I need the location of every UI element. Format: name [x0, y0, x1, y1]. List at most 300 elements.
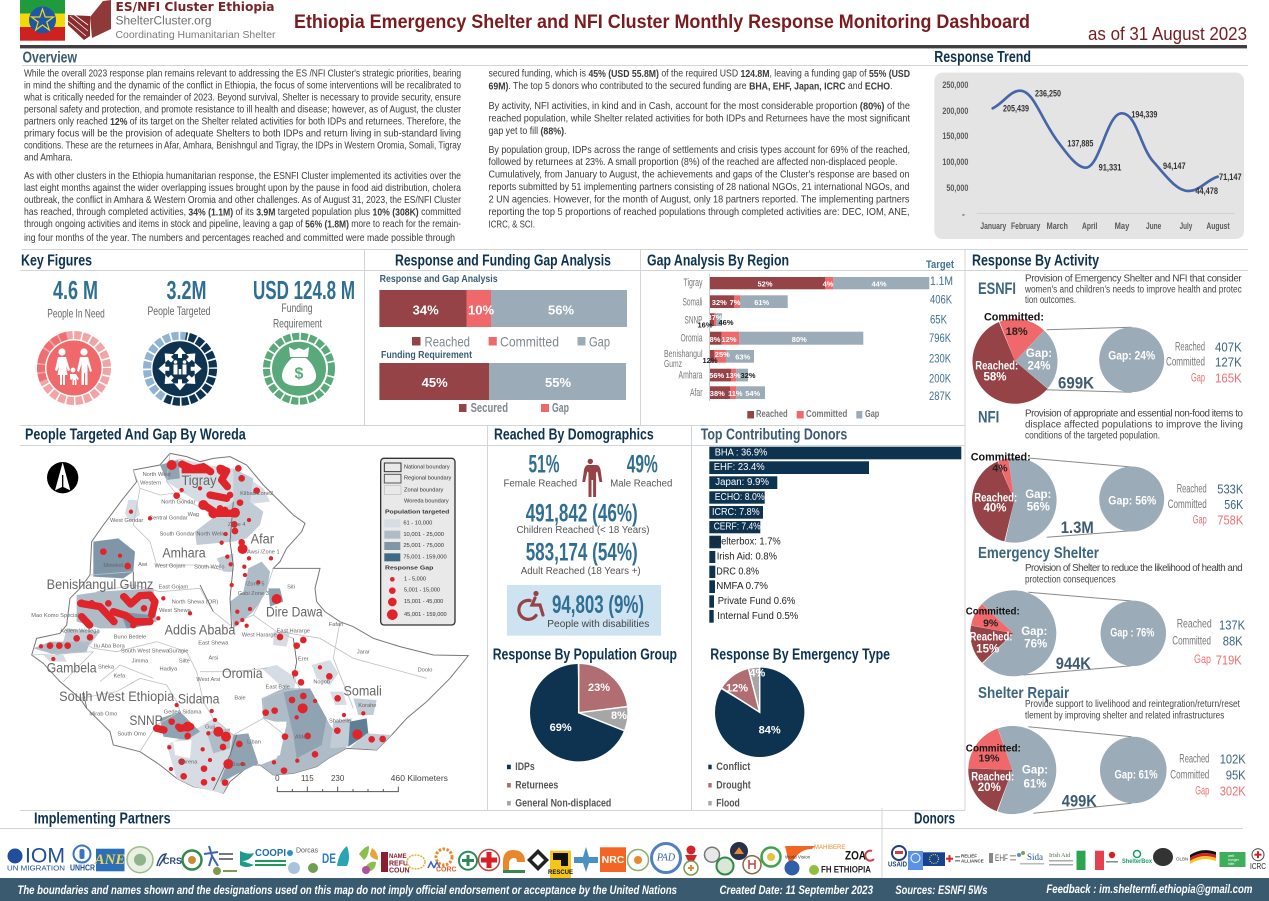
pie chart: emergency type: 4% [749, 668, 765, 680]
pie chart: shelter repair: 61% [1023, 778, 1047, 790]
breakout pie: gap: Gap: 24% [1108, 349, 1155, 363]
map labels: zones: Arsi [208, 655, 218, 661]
row: Tigray: 52% [757, 280, 773, 288]
row: Tigray [684, 274, 953, 289]
activity: shelter repair: tlement by improving shelter and related infrastructures [1025, 710, 1224, 722]
map labels: zones: East Shewa [198, 640, 229, 646]
callout: people with disabilities: People with disabilities [547, 619, 649, 630]
legend: region bars: Gap [865, 409, 879, 420]
activity: NFI: Provision of appropriate and essential non-food items to [1025, 408, 1244, 420]
stat: male reached [610, 450, 672, 490]
overview text: right column [488, 68, 910, 230]
panel: key figures [21, 252, 355, 410]
map labels: zones: Central Gondar [149, 515, 188, 521]
heading: population group: Response By Population Group [493, 646, 677, 664]
stat: adult reached: 583,174 (54%) [526, 538, 638, 566]
map labels: zones: Mirab Omo [89, 711, 117, 717]
callout: people with disabilities: 94,803 (9%) [552, 591, 644, 619]
stat: children reached [516, 499, 650, 536]
overview text: left column: personal safety and protection, and promote resistance to ill health and disease; however, as of August, the cluster [24, 104, 462, 116]
pie chart: population group: 23% [588, 682, 610, 694]
bar chart: donors: BHA : 36.9% [715, 448, 767, 458]
figure: funding requirement: USD 124.8 M [253, 275, 355, 305]
map legend [381, 458, 455, 625]
figure: people targeted: People Targeted [148, 304, 210, 318]
map labels: zones: Doolo [418, 668, 432, 674]
bar chart: donors: Shelterbox: 1.7% [710, 536, 781, 548]
map labels: zones: West Shewa [159, 608, 192, 614]
map labels: regions: Tigray [181, 472, 216, 488]
heading: response and funding gap analysis: Response and Funding Gap Analysis [395, 252, 611, 270]
logos: partners: PAD [656, 852, 676, 864]
overview text: left column: has reached, through completed activities, 34% (1.1M) of its 3.9M targeted population plus 10% (308K) committed [24, 207, 461, 218]
line chart: monthly reached: - [962, 209, 965, 219]
heading: response trend: Response Trend [934, 49, 1031, 66]
stat: female reached: 51% [528, 450, 560, 478]
map labels: regions: Oromia [222, 665, 263, 681]
row: Afar: 54% [745, 389, 761, 398]
legend: region bars [747, 409, 879, 420]
overview text: right column: reached population, while Shelter related activities for both IDPs and Returnees have the most significant [488, 114, 910, 124]
row: Tigray: 1.1M [930, 274, 953, 288]
pie chart: shelter repair: Reached: [971, 772, 1014, 784]
map labels: regions: Benishangul Gumz [47, 576, 153, 592]
total: 699K: 699K [1058, 374, 1095, 392]
row: SNNP: 65K [930, 312, 947, 326]
logos: donors: ICRC [1250, 862, 1266, 871]
figure: people targeted: 3.2M [166, 275, 206, 305]
heading: demographics: Reached By Domographics [494, 426, 654, 444]
overview text: right column: secured funding, which is 45% (USD 55.8M) of the required USD 124.8M, leaving a funding gap of 55% (USD [488, 68, 910, 80]
map labels: zones: Kefa [114, 674, 126, 680]
activity: emergency shelter: Provision of Shelter to reduce the likelihood of health and [1025, 563, 1243, 574]
panel: response by activity [966, 252, 1246, 813]
pie chart: shelter repair [966, 742, 1048, 798]
stats [1170, 752, 1246, 799]
heading: implementing partners: Implementing Partners [34, 810, 171, 828]
row: Somali: 406K [930, 292, 952, 306]
bar chart: donors: ICRC: 7.8% [712, 507, 760, 518]
stats: Committed [1172, 634, 1211, 648]
total: 944K: 944K [1056, 654, 1091, 673]
line chart: monthly reached: 94,147 [1163, 161, 1186, 171]
overview text: right column: By population group, IDPs across the range of settlements and crisis types account for 69% of the reached, [488, 145, 910, 156]
icon: money bag in ring: $ [295, 366, 304, 382]
map labels: zones: Ilu Aba Bora [94, 644, 126, 650]
pie chart: population group: 8% [611, 710, 627, 722]
line chart: monthly reached: June [1146, 221, 1161, 231]
map labels: zones: Gedeo Sidama [164, 709, 202, 715]
subheading: response and gap analysis: Response and Gap Analysis [380, 273, 498, 285]
breakout pie: gap: Gap: 56% [1108, 493, 1157, 507]
map labels: zones: Liban [247, 740, 261, 746]
stats: Reached [1177, 616, 1212, 630]
stats [1168, 483, 1244, 528]
overview text: left column: partners only reached 12% of its target on the Shelter related activities for both IDPs and returnees. Therefore, the [24, 116, 461, 128]
panel: reached by demographics [494, 426, 672, 636]
map labels: regions: Gambela [47, 660, 97, 676]
logos: partners [7, 842, 874, 878]
map labels: zones: South West Shewa [121, 649, 170, 655]
bar chart: donors: DRC 0.8% [716, 566, 759, 577]
line chart: monthly reached: 200,000 [942, 106, 968, 116]
map labels: zones: Awsi /Zone 1 [247, 550, 280, 556]
logos: partners: ANE [94, 852, 125, 868]
activity: ESNFI [975, 274, 1242, 392]
stat: female reached [503, 450, 577, 490]
bar chart: donors: NMFA 0.7% [716, 581, 768, 592]
stat: male reached: 49% [627, 450, 658, 478]
stats: 102K [1220, 752, 1246, 766]
logos: partners: IOM [25, 844, 65, 868]
row: Afar [690, 386, 951, 403]
heading: donors: Donors [914, 810, 955, 828]
stats: 758K [1217, 514, 1244, 528]
stat: children reached: Children Reached (< 18 Years) [516, 525, 650, 536]
legend: emergency type [708, 761, 751, 809]
stacked bar: response: 56% [548, 302, 574, 318]
pie chart: ESNFI: 24% [1027, 360, 1051, 372]
row: SNNP: 16% [697, 320, 713, 330]
pie chart: ESNFI: Reached: [975, 361, 1018, 373]
stats: 137K [1219, 618, 1246, 632]
row: Amhara: 13% [725, 371, 741, 380]
stats: 407K [1215, 340, 1242, 354]
stacked bar: funding: 55% [545, 375, 571, 390]
map labels: regions: South West Ethiopia [59, 688, 174, 704]
icon: Ethiopian flag [20, 0, 65, 41]
activity: emergency shelter: Emergency Shelter [978, 545, 1099, 562]
line chart: monthly reached: February [1011, 221, 1041, 231]
panel: donors [888, 810, 1266, 871]
created date: Created Date: 11 September 2023 [720, 883, 873, 897]
logos: partners: DE [322, 850, 336, 866]
pie chart: emergency shelter: 76% [1024, 638, 1047, 650]
overview text: left column: through ongoing activities and items in stock and pipeline, leaving a gap of 56% (1.8M) more to reach for the remain- [24, 219, 461, 230]
pie chart: emergency type [722, 668, 791, 743]
stats: Gap [1193, 515, 1207, 527]
map labels: zones: Wag [188, 512, 199, 518]
pie chart: emergency shelter [966, 603, 1047, 664]
activity: emergency shelter: protection consequences [1025, 574, 1116, 586]
legend: region bars: Reached [756, 409, 788, 420]
pie chart: population group [547, 664, 627, 744]
logos: donors: OLBN [1176, 856, 1188, 862]
response gap dots [172, 465, 357, 764]
header [20, 0, 1247, 48]
pie chart: ESNFI: Committed: [984, 312, 1044, 324]
panel: gap analysis by region [647, 252, 954, 420]
logos: partners: COUN [389, 868, 410, 874]
map labels: zones: Hadiya [160, 666, 178, 672]
row: Benishangul Gumz [664, 349, 951, 370]
stats: Committed [1166, 357, 1205, 369]
icon: shelter cluster logo [68, 0, 111, 40]
map labels: zones: East Gojam [159, 585, 188, 591]
line chart: monthly reached: 250,000 [942, 80, 968, 90]
row: Amhara: Amhara [678, 369, 703, 381]
row: Amhara: 56% [709, 371, 725, 380]
line chart: monthly reached: January [980, 221, 1007, 231]
bar chart: donors: Irish Aid: 0.8% [717, 552, 777, 562]
stats [1166, 340, 1242, 386]
pie chart: emergency shelter: Gap: [1021, 626, 1047, 638]
logos: partners: CORC [436, 866, 457, 874]
stat: adult reached: Adult Reached (18 Years +) [521, 566, 641, 577]
activity: NFI: NFI [978, 408, 999, 426]
pie chart: ESNFI: Gap: [1026, 348, 1052, 360]
overview text: left column: As with other clusters in the Ethiopia humanitarian response, the ESNFI Cluster implemented its activities over the [24, 171, 461, 182]
panel: response trend [934, 49, 1244, 239]
legend: funding bar [459, 401, 569, 415]
overview text: right column: reporting the top 5 proportions of reached populations through completed activities are: DEC, IOM, ANE, [488, 207, 910, 218]
line chart: monthly reached: 236,250 [1035, 88, 1061, 98]
activity: emergency shelter [966, 545, 1246, 675]
map labels: zones: East Bale [266, 685, 290, 691]
pie chart: emergency shelter: 9% [983, 618, 999, 630]
map labels: zones: Jarar [357, 650, 370, 656]
line chart: monthly reached: 137,885 [1067, 138, 1093, 148]
map scale bar [275, 774, 448, 792]
logos: donors: Sida [1027, 852, 1043, 862]
pie chart: NFI: 56% [1027, 501, 1050, 513]
map legend: Regional boundary [404, 476, 452, 482]
stats: Reached [1177, 484, 1207, 496]
legend: population group: IDPs [515, 761, 535, 773]
map labels: zones: North Gondar [161, 499, 196, 505]
cluster name: ES/NFI Cluster Ethiopia [116, 0, 274, 14]
legend: region bars: Committed [806, 409, 847, 420]
legend: response bar: Gap [589, 334, 610, 350]
overview text: right column: 69M). The top 5 donors who contributed to the secured funding are BHA, EHF, Japan, ICRC and ECHO. [488, 81, 892, 92]
figure: funding requirement: Funding [282, 301, 312, 315]
stats: Gap [1194, 652, 1211, 666]
logos: partners: NRC [602, 854, 625, 866]
map: Ethiopia [31, 453, 468, 793]
row: SNNP: SNNP [684, 314, 702, 326]
map legend: 5,001 - 15,000 [404, 588, 440, 594]
stats: Committed [1168, 499, 1207, 511]
overview text: right column: 2 UN agencies. However, for the month of August, only 18 partners reported. The implementing partners [488, 194, 910, 206]
figure: people in need: 4.6 M [53, 275, 98, 305]
stat: children reached: 491,842 (46%) [526, 499, 638, 527]
row: SNNP [684, 312, 947, 330]
legend: funding bar: Gap [552, 401, 569, 415]
bar chart: donors: ECHO: 8.0% [715, 492, 765, 503]
pie chart: NFI: Committed: [971, 451, 1031, 463]
row: Afar: Afar [690, 387, 703, 399]
logos: donors: hunger [1228, 858, 1240, 862]
subheading: funding requirement: Funding Requirement [381, 349, 472, 361]
row: Amhara: 32% [740, 371, 756, 380]
stacked bar: funding: 45% [422, 375, 448, 390]
figure: people targeted [142, 275, 218, 407]
map labels: regions: Addis Ababa [165, 621, 236, 637]
row: Somali: 7% [730, 298, 741, 307]
pie chart: population group: 69% [550, 722, 572, 734]
stats: 95K [1226, 769, 1246, 783]
overview text: left column: primary focus will be the provision of adequate Shelters to both IDPs and return living in sub-standard living [24, 128, 461, 140]
legend: population group [507, 761, 611, 809]
map labels: zones: Erer [298, 656, 309, 662]
icon: north arrow [47, 462, 78, 493]
map labels: zones: Kellem Wellega [60, 629, 100, 635]
map labels: zones: West Hararge [242, 633, 277, 639]
logos: partners: UNHCR [70, 864, 95, 872]
map labels: zones: South Wello [194, 564, 225, 570]
breakout pie: gap [1101, 601, 1166, 666]
row: Tigray: 44% [871, 280, 887, 288]
activity: ESNFI: ESNFI [978, 279, 1016, 298]
line chart: monthly reached: 71,147 [1219, 172, 1242, 182]
map labels: zones: Guji [205, 725, 215, 731]
logos: donors: hilfe [1228, 862, 1234, 866]
bar chart: donors: Internal Fund 0.5% [717, 611, 798, 622]
figure: people in need [32, 275, 116, 410]
pie chart: NFI: 40% [983, 503, 1007, 515]
row: Amhara: 200K [929, 371, 951, 385]
map labels: zones [31, 472, 432, 768]
line chart: monthly reached [934, 73, 1244, 239]
heading: emergency type: Response By Emergency Type [710, 646, 890, 664]
map labels: regions: Dire Dawa [266, 604, 323, 620]
line chart: monthly reached: April [1082, 221, 1097, 231]
map scale bar: 115 [301, 774, 314, 783]
row: Afar: 38% [710, 389, 725, 398]
map labels: regions: Afar [251, 530, 274, 546]
map legend: 15,001 - 45,000 [404, 599, 443, 605]
footer [0, 878, 1269, 901]
cluster website: ShelterCluster.org [116, 16, 212, 28]
logos: donors: Irish Aid [1049, 853, 1070, 859]
overview text: right column: By activity, NFI activities, in kind and in Cash, account for the most considerable proportion (80%) of the [488, 101, 910, 112]
total: 1.3M: 1.3M [1061, 518, 1094, 537]
line chart: monthly reached: August [1206, 221, 1230, 231]
map labels: zones: Awi [138, 562, 147, 568]
breakout pie: gap [1099, 466, 1164, 532]
overview text: right column: Cumulatively, from January to August, the achievements and gaps of the Cluster's response are based on [488, 170, 910, 180]
map labels: zones: Mao Komo Special [31, 613, 79, 619]
overview text: left column [23, 68, 462, 244]
map legend: 61 - 10,000 [403, 521, 432, 527]
breakout pie: gap [1100, 737, 1167, 803]
heading: map: People Targeted And Gap By Woreda [25, 426, 246, 444]
row: Oromia: 12% [721, 335, 737, 344]
bar chart: donors: Private Fund 0.6% [718, 596, 795, 607]
activity: ESNFI: Provision of Emergency Shelter and NFI that consider [1025, 274, 1242, 284]
map labels: regions: Somali [343, 683, 382, 699]
map legend: Woreda boundary [404, 498, 449, 504]
row: Afar: 11% [728, 389, 743, 398]
pie chart: shelter repair: Committed: [966, 742, 1021, 754]
stacked bar: funding [379, 363, 626, 400]
map scale bar: 230 [331, 774, 345, 783]
logos: donors: ShelterBox [1122, 859, 1153, 865]
row: SNNP: 37% [707, 313, 723, 322]
overview text: left column: While the overall 2023 response plan remains relevant to addressing the ES /NFI Cluster's strategic priorities, bearing [24, 68, 461, 80]
legend: response bar: Committed [500, 334, 559, 350]
title: Ethiopia Emergency Shelter and NFI Cluster Monthly Response Monitoring Dashboard [294, 11, 1030, 33]
map legend: National boundary [404, 464, 450, 470]
pie chart: shelter repair: 19% [978, 753, 1000, 765]
pie chart: emergency shelter: Committed: [966, 606, 1020, 618]
logos: donors: EHF [995, 853, 1008, 863]
pie chart: NFI: Gap: [1025, 489, 1051, 501]
pie chart: emergency shelter: Reached: [970, 632, 1012, 644]
map labels: zones: East Hararge [277, 628, 310, 634]
map labels: zones: West Arsi [196, 677, 220, 683]
heading: gap analysis by region: Gap Analysis By Region [647, 252, 789, 270]
sources: Sources: ESNFI 5Ws [895, 883, 988, 897]
row: Somali [682, 292, 952, 308]
map legend: 10,001 - 25,000 [403, 532, 444, 538]
stats: Reached [1179, 754, 1209, 766]
stats: 533K [1217, 483, 1244, 497]
stats: 302K [1220, 785, 1246, 799]
map legend: 25,001 - 75,000 [403, 543, 444, 549]
row: Benishangul Gumz: 63% [735, 352, 751, 362]
map labels: regions: SNNP [129, 712, 163, 728]
legend: population group: Returnees [515, 779, 558, 791]
logos: donors: USAID [888, 862, 907, 868]
bar chart: donors: Japan: 9.9% [715, 477, 769, 488]
stats: 165K [1215, 372, 1242, 386]
row: SNNP: 46% [718, 318, 734, 327]
map labels: zones: Fafan [329, 622, 343, 628]
pie chart: emergency type: 12% [726, 682, 748, 694]
cluster tagline: Coordinating Humanitarian Shelter [116, 29, 276, 41]
stat: female reached: Female Reached [503, 478, 577, 490]
row: Somali: 61% [754, 298, 770, 307]
map labels: zones: Borena [179, 759, 198, 765]
stacked bar: response [379, 290, 627, 327]
map labels: zones: South Omo [117, 731, 146, 737]
stats: 56K [1224, 498, 1244, 512]
map labels: regions: Amhara [162, 545, 206, 561]
legend: response bar: Reached [424, 334, 470, 350]
logos: partners: Dorcas [296, 848, 319, 854]
map labels: zones: Metekel [103, 563, 123, 569]
figure: people in need: People In Need [47, 306, 105, 320]
panel: top contributing donors [701, 426, 961, 623]
map labels: zones: Bale [234, 695, 246, 701]
pie chart: ESNFI [975, 312, 1052, 391]
row: Benishangul Gumz: 25% [715, 350, 730, 359]
breakout pie: gap: Gap : 76% [1110, 626, 1155, 640]
map labels: zones: Gabi Zone 3 [238, 591, 269, 597]
logos: partners: NAME [389, 854, 407, 860]
breakout pie: gap [1099, 327, 1164, 392]
activity: NFI: displace affected populations to improve the living [1025, 420, 1243, 430]
row: Oromia: 80% [792, 335, 807, 344]
target column title: Target [926, 259, 954, 271]
line chart: monthly reached: 205,439 [1003, 104, 1029, 114]
overview text: left column: what is critically needed for the remainder of 2023. Beyond survival, Shelter is necessary to provide security, ensure [23, 92, 461, 104]
stats: Reached [1175, 341, 1205, 353]
pie chart: shelter repair: Gap: [1022, 765, 1048, 777]
row: Benishangul Gumz: Gumz [664, 359, 682, 370]
bar chart: regions [664, 274, 953, 403]
figure: funding requirement [253, 275, 355, 401]
icon: target arrows in ring [142, 330, 218, 407]
heading: donors chart: Top Contributing Donors [701, 426, 847, 444]
row: Tigray: 4% [823, 280, 834, 288]
stat: adult reached [521, 538, 641, 577]
heading: response by activity: Response By Activity [972, 252, 1099, 270]
map labels: zones: West Gondar [110, 518, 143, 524]
country outline [32, 453, 468, 793]
bar chart: donors: CERF: 7.4% [714, 522, 761, 532]
